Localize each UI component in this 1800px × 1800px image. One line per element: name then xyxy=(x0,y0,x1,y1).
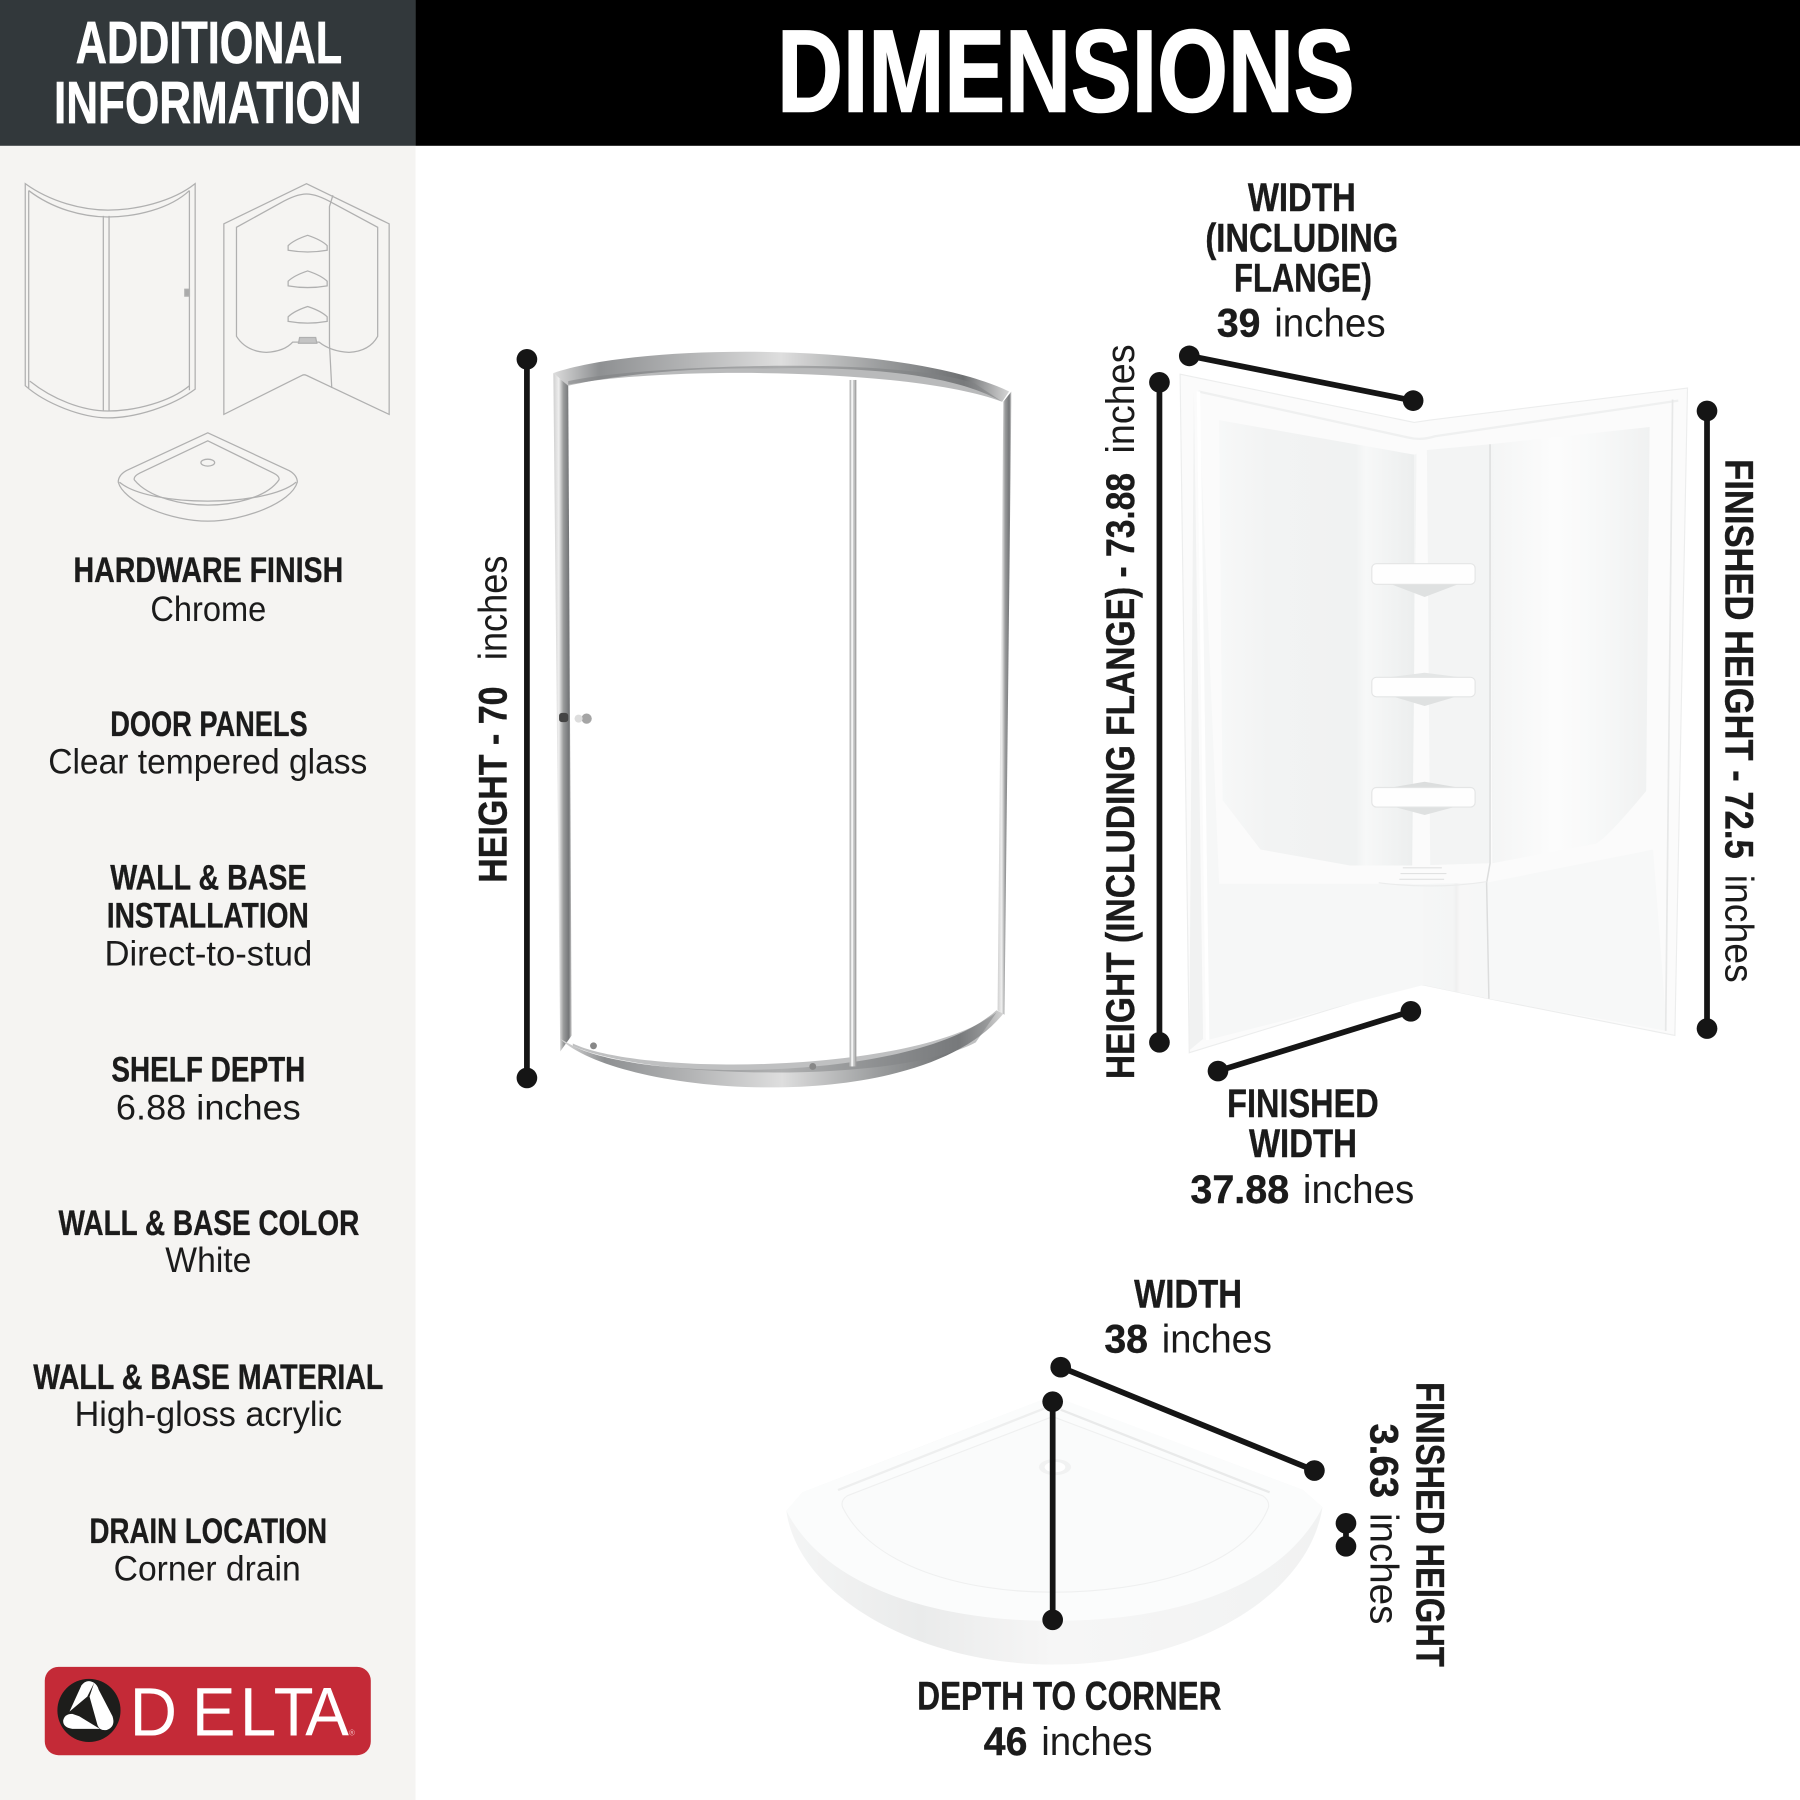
panel: sidebar background xyxy=(0,146,416,1800)
text block: drain location xyxy=(90,1511,327,1589)
text block: shelf depth: SHELF DEPTH xyxy=(111,1049,305,1089)
shelves xyxy=(1372,564,1475,815)
logo: Delta: DELTA xyxy=(130,1674,349,1751)
product: wall panels xyxy=(1180,374,1688,1053)
label: finished width: FINISHED xyxy=(1227,1081,1379,1126)
icon: wall line drawing xyxy=(224,184,389,414)
dimension: wall width line xyxy=(1179,346,1423,411)
icon: door line drawing xyxy=(25,184,195,418)
label: base finished height xyxy=(1362,1382,1453,1667)
text block: drain location: Corner drain xyxy=(114,1549,301,1589)
text block: shelf depth: 6.88 inches xyxy=(116,1087,301,1127)
panel: dimensions header: DIMENSIONS xyxy=(777,5,1355,136)
text block: hardware finish xyxy=(73,550,343,629)
dimension: wall height line xyxy=(1149,372,1170,1053)
icon: door handle xyxy=(559,713,592,724)
label: depth to corner: DEPTH TO CORNER xyxy=(917,1673,1221,1718)
text block: wall and base color: White xyxy=(165,1240,251,1280)
text block: wall and base installation: INSTALLATION xyxy=(107,896,309,936)
label: finished width: WIDTH xyxy=(1249,1121,1357,1166)
text block: door panels: Clear tempered glass xyxy=(48,742,367,782)
label: base finished height: inches xyxy=(1362,1513,1407,1624)
dimension: base height marker xyxy=(1336,1513,1356,1557)
label: base width: 38 xyxy=(1104,1316,1148,1361)
label: width including flange: 39 xyxy=(1217,300,1260,345)
label: finished width xyxy=(1190,1081,1414,1212)
label: wall height including flange: inches xyxy=(1098,344,1143,453)
text block: hardware finish: HARDWARE FINISH xyxy=(73,550,343,590)
logo: Delta xyxy=(45,1667,371,1755)
logo: Delta: ® xyxy=(349,1729,355,1738)
label: width including flange: inches xyxy=(1274,300,1386,345)
text block: door panels: DOOR PANELS xyxy=(110,704,308,744)
label: door height: HEIGHT - 70 xyxy=(470,686,515,883)
label: base finished height: FINISHED HEIGHT xyxy=(1408,1382,1453,1667)
panel: additional information header: ADDITIONAL xyxy=(76,9,342,76)
label: base width: inches xyxy=(1162,1316,1272,1361)
dimension: finished height line xyxy=(1697,401,1717,1039)
label: base width: WIDTH xyxy=(1134,1272,1242,1317)
text block: wall and base installation xyxy=(104,858,312,973)
panel: additional information header xyxy=(0,0,416,146)
label: width including flange: (INCLUDING xyxy=(1205,215,1398,260)
text block: wall and base installation: Direct-to-stud xyxy=(104,933,312,973)
label: finished height: inches xyxy=(1716,875,1761,983)
text block: shelf depth xyxy=(111,1049,305,1127)
label: finished width: inches xyxy=(1303,1167,1414,1212)
text block: door panels xyxy=(48,704,367,782)
text block: drain location: DRAIN LOCATION xyxy=(90,1511,327,1551)
label: door height: inches xyxy=(470,556,515,660)
text block: wall and base color: WALL & BASE COLOR xyxy=(59,1203,359,1243)
label: finished width: 37.88 xyxy=(1190,1167,1289,1212)
label: width including flange: WIDTH xyxy=(1248,175,1356,220)
text block: wall and base material xyxy=(33,1357,383,1434)
text block: hardware finish: Chrome xyxy=(150,589,266,629)
icon: base line drawing xyxy=(118,433,297,521)
panel: dimensions header xyxy=(416,0,1800,146)
label: depth to corner: inches xyxy=(1041,1719,1153,1764)
product: shower door xyxy=(553,352,1011,1087)
text block: wall and base material: High-gloss acrylic xyxy=(75,1394,342,1434)
label: finished height: FINISHED HEIGHT - 72.5 xyxy=(1716,459,1761,859)
text block: wall and base installation: WALL & BASE xyxy=(110,858,307,898)
dimension: base width line xyxy=(1050,1357,1325,1481)
label: width including flange xyxy=(1205,175,1398,345)
panel: additional information header: INFORMATION xyxy=(54,69,362,136)
label: width including flange: FLANGE) xyxy=(1234,256,1372,301)
text block: wall and base color xyxy=(59,1203,359,1280)
dimension: door height line xyxy=(517,349,537,1088)
label: depth to corner: 46 xyxy=(984,1719,1027,1764)
label: base width xyxy=(1104,1272,1272,1361)
dimension: finished width line xyxy=(1208,1001,1421,1081)
product: shower base xyxy=(786,1396,1322,1665)
label: base finished height: 3.63 xyxy=(1362,1423,1407,1498)
dimension: depth to corner line xyxy=(1042,1391,1063,1630)
label: depth to corner xyxy=(917,1673,1221,1764)
label: wall height including flange: HEIGHT (INCLUDING FLANGE) - 73.88 xyxy=(1098,473,1143,1079)
text block: wall and base material: WALL & BASE MATERIAL xyxy=(33,1357,383,1397)
